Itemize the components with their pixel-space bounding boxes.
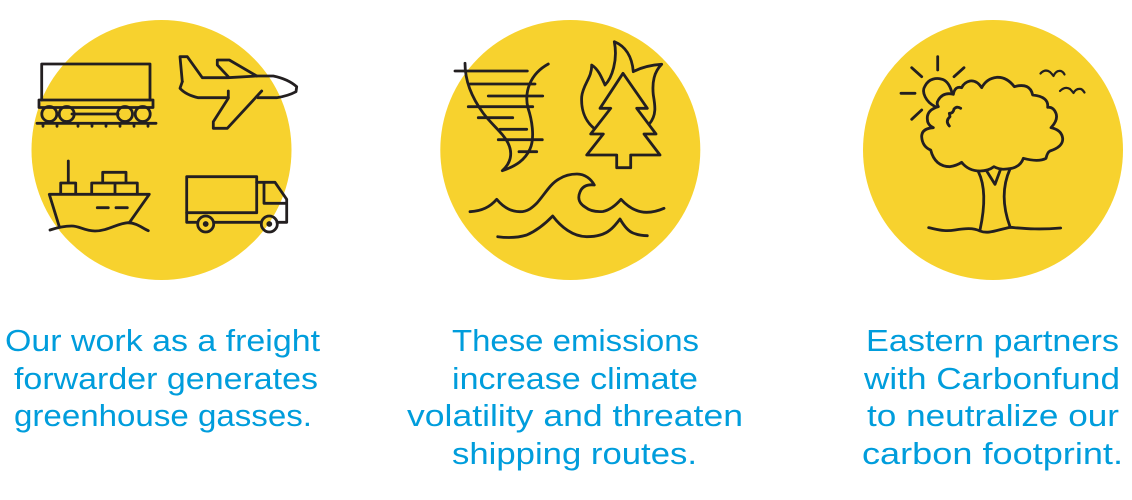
caption: carbon: Eastern partners	[866, 323, 1119, 358]
caption: freight: forwarder generates	[14, 361, 318, 396]
caption: climate	[407, 323, 743, 471]
caption: carbon: carbon footprint.	[862, 436, 1123, 471]
icon: cargo ship	[49, 161, 149, 231]
caption: climate: shipping routes.	[452, 436, 697, 471]
panel: carbon offset	[862, 20, 1123, 471]
yellow circle	[440, 20, 700, 280]
icon: tornado	[455, 63, 548, 171]
caption: freight: Our work as a freight	[5, 323, 320, 358]
panel: climate volatility	[407, 20, 743, 471]
yellow circle	[863, 20, 1123, 280]
caption: carbon: with Carbonfund	[863, 361, 1120, 396]
icon: airplane	[180, 57, 297, 128]
icon: tree	[922, 77, 1063, 232]
icon: delivery truck	[187, 177, 287, 232]
panel: freight emissions	[5, 20, 320, 433]
caption: climate: increase climate	[452, 361, 698, 396]
icon: sun	[901, 57, 964, 119]
icon: birds	[1040, 71, 1084, 93]
icon: burning tree	[582, 42, 662, 168]
icon: freight train	[37, 64, 156, 126]
caption: freight	[5, 323, 320, 433]
caption: climate: These emissions	[452, 323, 699, 358]
caption: freight: greenhouse gasses.	[14, 398, 312, 433]
caption: carbon	[862, 323, 1123, 471]
caption: carbon: to neutralize our	[867, 398, 1119, 433]
caption: climate: volatility and threaten	[407, 398, 743, 433]
yellow circle	[32, 20, 292, 280]
icon: ocean waves	[470, 174, 664, 238]
